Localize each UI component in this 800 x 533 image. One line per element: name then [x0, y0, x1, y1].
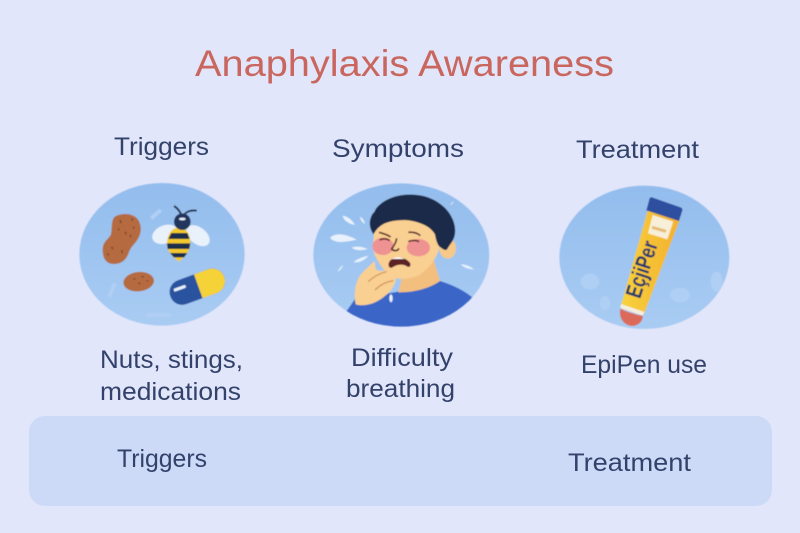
icon: capsule [166, 265, 229, 308]
hair [370, 194, 455, 250]
panel: triggers illustration [79, 183, 245, 326]
text: symptoms caption [346, 344, 455, 403]
pen tip [620, 309, 643, 326]
panel: treatment illustration [559, 186, 729, 329]
icon: epipen [620, 197, 682, 326]
text: symptoms caption: Difficulty [351, 344, 454, 372]
heading: symptoms: Symptoms [332, 135, 464, 163]
ear [439, 238, 456, 259]
heading: triggers: Triggers [114, 133, 209, 161]
title: Anaphylaxis Awareness [195, 43, 614, 84]
text: triggers caption: Nuts, stings, [100, 346, 243, 374]
cheeks [372, 238, 394, 255]
icon: peanut [103, 214, 141, 264]
icon: bee [149, 206, 214, 262]
face features [379, 232, 420, 251]
heading: treatment: Treatment [576, 136, 699, 164]
mouth [389, 257, 410, 268]
pen brand text: EçjiPer [620, 237, 663, 301]
icon: nut slice [122, 270, 155, 293]
panel: symptoms illustration [313, 183, 489, 329]
text: triggers caption: medications [100, 378, 241, 406]
text: treatment caption: EpiPen use [581, 351, 707, 379]
panel: bottom band [29, 416, 772, 506]
text: triggers caption [100, 346, 243, 406]
text: symptoms caption: breathing [346, 375, 455, 403]
hand [355, 261, 396, 305]
icon: sweat and cough droplets [330, 201, 474, 272]
band label: triggers: Triggers [117, 445, 207, 473]
shirt [345, 281, 482, 329]
label [648, 215, 673, 239]
cap [646, 197, 682, 221]
neck [398, 258, 440, 292]
band label: treatment: Treatment [568, 449, 691, 477]
face [373, 212, 440, 279]
